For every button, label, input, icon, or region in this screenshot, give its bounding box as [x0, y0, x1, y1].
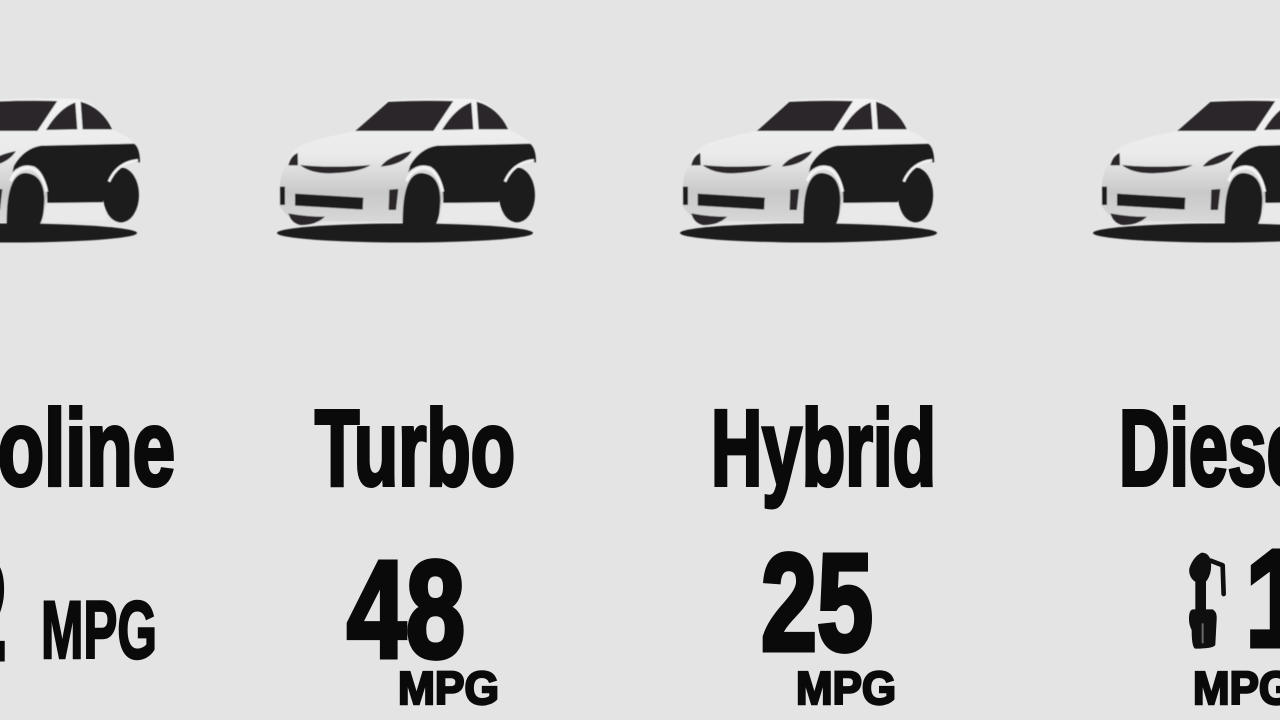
unit: turbo mpg: MPG — [398, 662, 499, 714]
panel: diesel — [1093, 99, 1280, 714]
car icon: diesel — [1093, 99, 1280, 243]
car icon: turbo — [277, 99, 536, 243]
icon: fuel nozzle — [1189, 553, 1224, 649]
car icon: hybrid — [680, 99, 937, 243]
value: turbo mpg: 48 — [347, 533, 465, 687]
value: hybrid mpg: 25 — [761, 526, 873, 680]
panel: gasoline — [0, 99, 175, 689]
unit: gasoline mpg: MPG — [41, 585, 157, 676]
panel: hybrid — [680, 99, 937, 714]
unit: hybrid mpg: MPG — [796, 662, 896, 714]
heading: turbo: Turbo — [315, 387, 515, 508]
heading: hybrid: Hybrid — [711, 387, 936, 508]
panel: turbo — [277, 99, 536, 714]
car icon: gasoline — [0, 99, 140, 243]
